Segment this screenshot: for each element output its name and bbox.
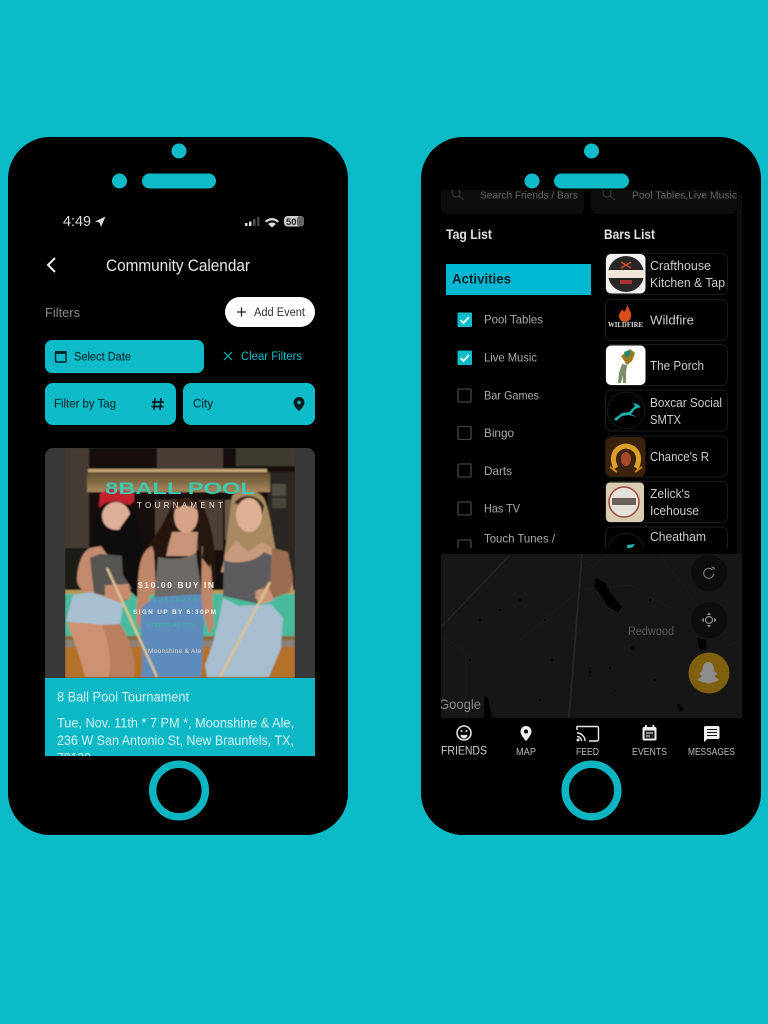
filter by tag: [45, 383, 176, 425]
nav: feed: [576, 726, 599, 758]
bar: Wildfire: WILDFIRE: [608, 320, 643, 329]
city filter: City: [193, 398, 213, 410]
poster text: SIGN UP BY 6:30PM: [133, 609, 216, 616]
unchecked tags: [458, 388, 556, 553]
woman left: [90, 505, 146, 600]
poster text: STARTS AT 7PM: [147, 623, 195, 629]
bar: Zelick's Icehouse: [606, 482, 728, 522]
header: back arrow and title: [48, 257, 250, 275]
unchecked tags: Darts: [484, 464, 512, 478]
bar: Cheatham: Cheatham: [650, 529, 706, 544]
phone body: [421, 137, 761, 835]
speaker and camera: [524, 144, 629, 188]
checked tags: [458, 312, 543, 365]
event card: [45, 448, 315, 766]
search bars: [441, 190, 737, 214]
search bars: Search Friends / Bars: [480, 190, 578, 202]
select date filter: Select Date: [74, 352, 131, 364]
activities header: Activities: [452, 272, 511, 286]
google logo text: Google: [439, 696, 481, 712]
status bar: 50: [286, 217, 297, 228]
tag list heading: Tag List: [446, 227, 492, 242]
speaker and camera: [112, 144, 216, 188]
poster text: [105, 479, 255, 655]
map label: Redwood: Redwood: [628, 626, 674, 638]
status bar: [63, 213, 304, 230]
tag list column: [446, 227, 728, 570]
map recenter button: [691, 602, 727, 638]
card photo surround: [45, 448, 315, 678]
bar: Chance's R: Chance's R: [650, 449, 709, 464]
card text panel: 8 Ball Pool Tournament: [57, 690, 189, 704]
infographic: two phone mockups: [8, 137, 761, 835]
pool table and floor: [65, 592, 295, 638]
nav: messages: MESSAGES: [688, 746, 735, 758]
left phone: [8, 137, 348, 835]
nav: map: MAP: [516, 746, 536, 758]
right phone: [421, 137, 761, 835]
poster text: 8BALL POOL: [105, 479, 255, 498]
bar: Wildfire: [606, 300, 728, 340]
card text panel: 236 W San Antonio St, New Braunfels, TX,: [57, 733, 294, 748]
woman middle: [148, 498, 216, 596]
bar: Zelick's Icehouse: Zelick's: [650, 486, 690, 501]
header: back arrow and title: Community Calendar: [106, 257, 250, 275]
bar: Crafthouse: [606, 254, 728, 294]
woman right: [224, 490, 278, 564]
bar: Boxcar Social SMTX: Boxcar Social: [650, 395, 722, 410]
select date filter: [45, 340, 204, 373]
bar: Chance's R: [606, 436, 728, 477]
add event button: Add Event: [254, 307, 306, 319]
bar: Boxcar Social SMTX: SMTX: [650, 412, 681, 427]
card text panel: [45, 678, 315, 756]
checked tags: Live Music: [484, 350, 537, 364]
poster text: TOURNAMENT: [137, 501, 223, 510]
bar: Wildfire: Wildfire: [650, 312, 694, 328]
card text panel: 78130: [57, 750, 91, 766]
nav: events: [632, 725, 667, 758]
snapchat button: [688, 652, 730, 694]
nav: events: EVENTS: [632, 746, 667, 758]
city filter: [183, 383, 315, 425]
bar: Crafthouse: Kitchen & Tap: [650, 275, 725, 290]
bar: Cheatham: [605, 526, 728, 548]
unchecked tags: Bar Games: [484, 388, 539, 402]
filter by tag: Filter by Tag: [54, 398, 116, 410]
unchecked tags: Has TV: [484, 502, 520, 516]
bar: Zelick's Icehouse: Icehouse: [650, 503, 699, 518]
nav: messages: [688, 726, 735, 758]
bars list heading: Bars List: [604, 227, 655, 242]
nav: feed: FEED: [576, 746, 599, 758]
right edge strip: [737, 195, 742, 554]
home button: [565, 764, 618, 817]
bar: Crafthouse: Crafthouse: [650, 258, 711, 273]
search bars: Pool Tables,Live Music: [632, 190, 737, 202]
phone body: [8, 137, 348, 835]
map panel: [439, 554, 742, 718]
activities header: [446, 264, 591, 295]
poster text: TUESDAYS: [153, 598, 197, 604]
nav: friends: [441, 726, 487, 758]
bottom navigation: [441, 725, 735, 758]
nav: map: [516, 726, 536, 758]
bar: Boxcar Social SMTX: [606, 390, 728, 431]
unchecked tags: Touch Tunes /: [484, 532, 556, 546]
bar: The Porch: The Porch: [650, 358, 704, 373]
nav: friends: FRIENDS: [441, 746, 487, 758]
poster text: $10.00 BUY IN: [138, 580, 214, 590]
unchecked tags: Bingo: [484, 426, 514, 440]
clear filters: Clear Filters: [241, 351, 302, 363]
bar: The Porch: [606, 344, 728, 386]
add event button: [225, 297, 315, 327]
status bar: 4:49: [63, 213, 91, 230]
event poster photo: [65, 448, 295, 678]
map refresh button: [691, 555, 727, 591]
card text panel: Tue, Nov. 11th * 7 PM *, Moonshine & Ale,: [57, 716, 294, 730]
poster text: Moonshine & Ale: [148, 648, 201, 655]
filters label: Filters: [45, 305, 80, 320]
home button: [153, 764, 205, 817]
cue sticks: [107, 568, 157, 677]
checked tags: Pool Tables: [484, 312, 543, 326]
